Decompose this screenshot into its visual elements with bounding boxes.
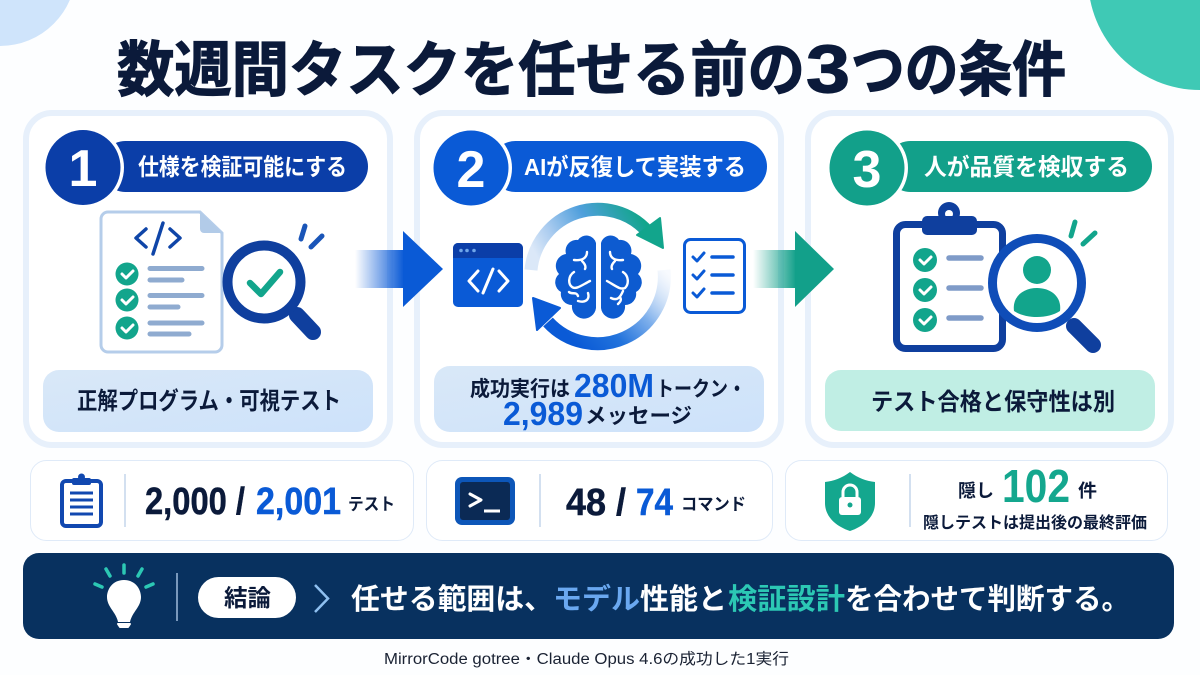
step 2 header pill: [430, 127, 767, 209]
step 3 note: テスト合格と保守性は別: [871, 389, 1115, 416]
step 1 note: 正解プログラム・可視テスト: [77, 387, 341, 415]
step 3 note: [825, 370, 1155, 431]
step 1 header pill: [42, 126, 368, 208]
panel: step 1: [26, 113, 390, 445]
stat card: hidden tests: [786, 460, 1168, 540]
stat card: commands: 48 /: [566, 482, 626, 524]
decorative corner circle: teal: [1088, 0, 1200, 90]
icon: magnifier with check: [228, 226, 322, 332]
conclusion banner: [23, 553, 1174, 639]
icon: brain: [555, 236, 642, 319]
icon: magnifier with person: [992, 222, 1095, 345]
step 3 header pill: 3: [853, 141, 881, 199]
step 2 note: 成功実行は: [470, 377, 570, 401]
conclusion text: モデル: [553, 582, 640, 616]
step 1 header pill: 1: [69, 140, 97, 198]
step 1 header pill: 仕様を検証可能にする: [138, 154, 347, 180]
stat card: hidden tests: 隠し: [958, 481, 994, 501]
title: 3: [806, 31, 850, 107]
icon: terminal: [455, 477, 515, 525]
step 2 note: [434, 366, 764, 432]
arrow: step 2 to step 3: [753, 231, 834, 307]
stat card: tests: 2,001: [256, 481, 341, 523]
stat card: hidden tests: 102: [1002, 460, 1070, 512]
arrow: step 1 to step 2: [355, 231, 443, 307]
stat card: commands: 74: [636, 482, 673, 524]
icon: light bulb: [95, 565, 153, 627]
step 3 header pill: 人が品質を検収する: [924, 153, 1129, 180]
stat card: commands: [426, 460, 772, 540]
title: つの条件: [851, 37, 1066, 104]
conclusion text: 任せる範囲は、: [351, 583, 553, 616]
conclusion text: 検証設計: [728, 583, 845, 616]
stat card: hidden tests: 件: [1078, 481, 1097, 501]
stat card: commands: コマンド: [681, 495, 746, 514]
icon: clipboard with checks: [896, 202, 1002, 348]
icon: shield with lock: [825, 472, 875, 531]
icon: clipboard: [62, 474, 101, 526]
step 1 note: [43, 370, 373, 432]
step 2 header pill: AIが反復して実装する: [524, 153, 746, 180]
conclusion text: [351, 582, 1130, 616]
decorative corner circle: light blue: [0, 0, 76, 46]
conclusion label pill: 結論: [224, 585, 271, 611]
icon: iteration loop arrows: [531, 209, 664, 344]
title: 数週間タスクを任せる前の: [117, 37, 805, 104]
panel: step 2: [417, 113, 781, 445]
icon: document with checks: [101, 212, 222, 352]
icon: checklist: [684, 240, 744, 312]
stat card: tests: 2,000 /: [145, 481, 245, 523]
conclusion text: を合わせて判断する。: [845, 583, 1130, 616]
icon: chevron: [315, 585, 328, 612]
icon: code window: [453, 243, 523, 307]
step 2 note: 2,989: [503, 395, 583, 432]
stat card: tests: [30, 460, 414, 540]
step 2 note: トークン・: [656, 378, 746, 401]
conclusion label pill: [198, 577, 296, 618]
stat card: hidden tests: 隠しテストは提出後の最終評価: [923, 513, 1147, 532]
step 3 header pill: [826, 127, 1152, 209]
source footnote: MirrorCode gotree・Claude Opus 4.6の成功した1実行: [384, 650, 789, 668]
panel: step 3: [808, 113, 1171, 445]
step 2 header pill: 2: [457, 141, 485, 199]
stat card: tests: テスト: [348, 495, 395, 514]
step 2 note: メッセージ: [585, 405, 692, 428]
title: [117, 31, 1066, 107]
conclusion text: 性能と: [640, 583, 727, 616]
step 2 note: 280M: [574, 367, 654, 404]
